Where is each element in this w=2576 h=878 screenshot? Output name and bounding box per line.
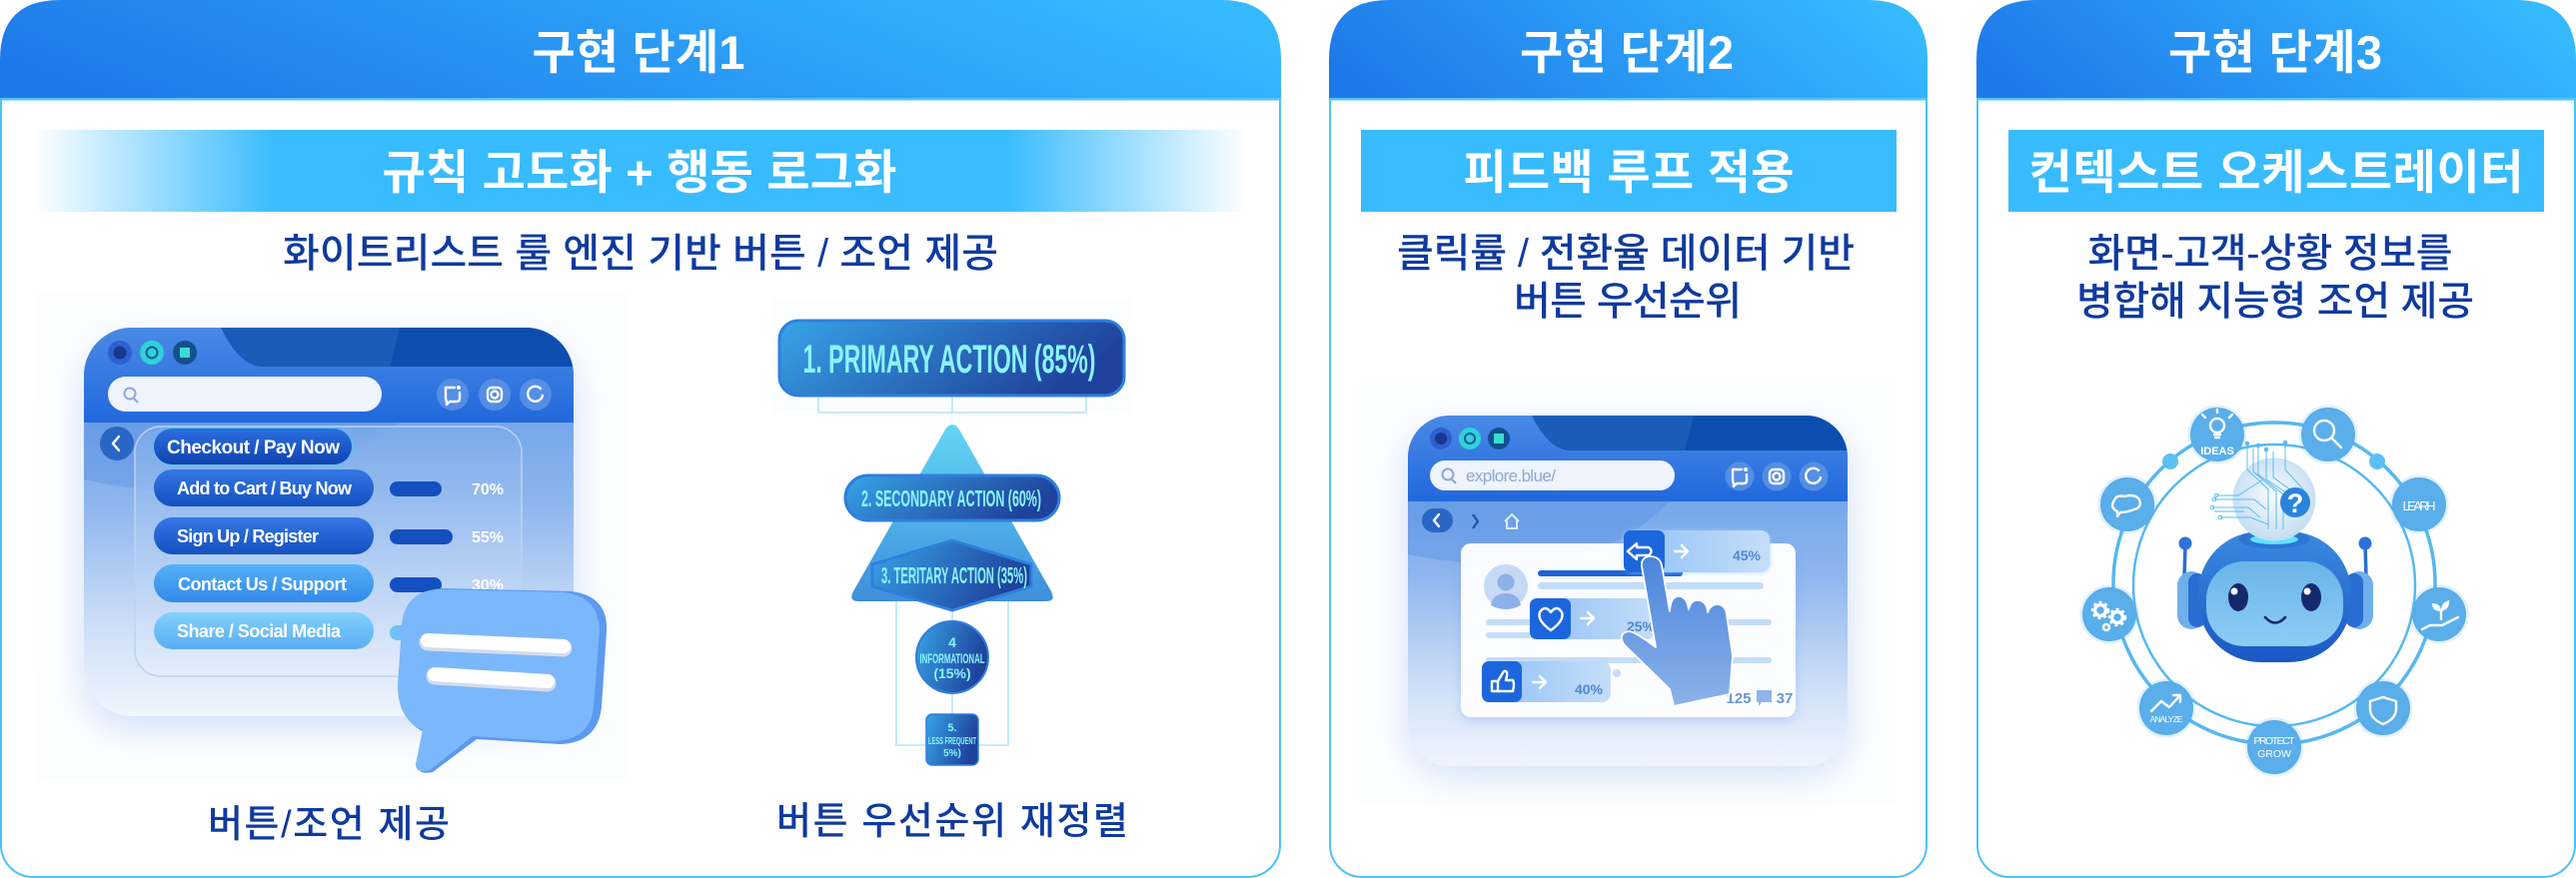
inner list card	[135, 427, 522, 676]
panel: implementation step 2	[1329, 0, 1928, 877]
button: share: Share / Social Media	[177, 621, 342, 641]
label: buttons and advice: 버튼/조언 제공	[208, 804, 450, 846]
ears	[2177, 571, 2373, 629]
diagram: priority hierarchy	[772, 300, 1132, 765]
window dots	[108, 341, 197, 365]
header: step 2: 구현 단계2	[1520, 26, 1734, 79]
level 5: less frequent	[926, 714, 978, 765]
level 2: secondary action: 2. SECONDARY ACTION (60%)	[861, 485, 1041, 511]
icon: magnifier	[2301, 408, 2355, 461]
level 1: primary action: 1. PRIMARY ACTION (85%)	[803, 338, 1095, 382]
level 1: primary action	[779, 321, 1124, 396]
content card	[1461, 543, 1796, 721]
button: checkout	[154, 429, 352, 464]
header: step 2	[1329, 0, 1928, 100]
text: click rate based priority: 버튼 우선순위	[1514, 280, 1742, 324]
icon: gears	[2082, 587, 2136, 641]
back button	[100, 427, 134, 460]
icon: shield	[2356, 681, 2410, 735]
band heading: feedback loop: 피드백 루프 적용	[1463, 146, 1795, 199]
antennae	[2178, 537, 2372, 577]
navigation controls	[1422, 508, 1519, 532]
icon: learn: LEARH	[2402, 498, 2436, 513]
toolbar icons	[1725, 461, 1829, 491]
button: sign up: Sign Up / Register	[177, 526, 319, 546]
band heading: context orchestrator: 컨텍스트 오케스트레이터	[2028, 146, 2524, 199]
icon: protect grow	[2247, 720, 2301, 774]
address bar: explore.blue/	[1466, 466, 1556, 485]
text: context merging description	[2076, 232, 2474, 324]
level 4: informational: 4	[948, 634, 956, 650]
button: contact: Contact Us / Support	[178, 574, 347, 594]
band heading: context orchestrator	[2008, 130, 2544, 212]
label: button priority re-sorting: 버튼 우선순위 재정렬	[776, 801, 1128, 843]
button: share	[154, 612, 430, 649]
button: add to cart: 70%	[472, 481, 504, 498]
icon: learn	[2392, 477, 2446, 531]
button: contact: 30%	[472, 577, 504, 594]
top glow socket	[2238, 530, 2310, 548]
glass globe	[2233, 458, 2315, 540]
tile: heart 25%: 25%	[1627, 618, 1656, 634]
icon: pointing hand	[1622, 556, 1733, 706]
illustration: robot with orbit icons	[2082, 408, 2466, 774]
band heading: feedback loop	[1361, 130, 1897, 212]
content card: 37	[1777, 690, 1793, 707]
level 5: less frequent: 5%)	[943, 748, 961, 759]
icon: analyze: ANALYZE	[2150, 714, 2183, 724]
face screen	[2206, 561, 2343, 646]
level 3: tertiary action	[872, 540, 1031, 610]
button: checkout: Checkout / Pay Now	[167, 438, 340, 458]
icon: protect grow: PROTECT	[2254, 735, 2295, 747]
eyes and smile	[2228, 583, 2321, 623]
question mark badge	[2280, 487, 2310, 518]
header: step 3: 구현 단계3	[2168, 26, 2382, 79]
toolbar icons	[437, 379, 552, 411]
tile: thumbs up 40%: 40%	[1575, 681, 1604, 697]
level 3: tertiary action: 3. TERITARY ACTION (35%)	[881, 562, 1027, 588]
icon: protect grow: GROW	[2257, 748, 2291, 760]
circuit lines	[2210, 440, 2303, 529]
button: sign up: 55%	[472, 529, 504, 546]
button: add to cart: Add to Cart / Buy Now	[177, 478, 353, 498]
icon: analyze	[2139, 681, 2193, 735]
band heading: rule upgrade and behavior logging	[34, 130, 1247, 212]
level 4: informational: (15%)	[933, 665, 971, 681]
button: contact	[154, 564, 504, 602]
text: click rate based priority: 클릭률 / 전환율 데이터 기반	[1397, 232, 1855, 276]
tile: share 45%: 45%	[1733, 547, 1762, 563]
orbit connector dots	[2162, 453, 2385, 469]
robot	[2177, 440, 2373, 662]
tile: thumbs up 40%	[1482, 661, 1611, 702]
level 4: informational: INFORMATIONAL	[919, 650, 985, 666]
header: step 3	[1976, 0, 2576, 100]
tile: heart 25%	[1530, 598, 1656, 639]
button: sign up	[154, 517, 504, 554]
content card: 125	[1726, 690, 1752, 707]
text: context merging description: 화면-고객-상황 정보를	[2088, 232, 2452, 276]
icon: ideas	[2190, 408, 2244, 461]
panel: implementation step 1	[0, 0, 1281, 877]
icon: ideas: IDEAS	[2200, 445, 2234, 457]
speech bubble	[398, 588, 607, 773]
band heading: rule upgrade and behavior logging: 규칙 고도화 + 행동 로그화	[382, 146, 897, 199]
level 4: informational	[916, 621, 988, 693]
header: step 1: 구현 단계1	[532, 26, 745, 79]
search bar	[108, 377, 382, 412]
head	[2198, 531, 2351, 662]
text: whitelist rule engine description: 화이트리스트 룰 엔진 기반 버튼 / 조언 제공	[283, 232, 998, 276]
triangle	[851, 425, 1053, 601]
text: context merging description: 병합해 지능형 조언 제공	[2076, 280, 2474, 324]
level 5: less frequent: 5.	[947, 722, 957, 734]
header: step 1	[0, 0, 1281, 100]
illustration: browser with button list and speech bubble	[64, 324, 608, 773]
icon: chat	[2100, 477, 2154, 531]
button: add to cart	[154, 469, 504, 506]
level 5: less frequent: LESS FREQUENT	[928, 736, 976, 747]
window dots	[1430, 428, 1510, 449]
connector lines	[818, 397, 1086, 745]
address bar	[1430, 460, 1675, 490]
icon: plant in hand	[2412, 587, 2466, 641]
text: click rate based priority	[1397, 232, 1855, 324]
tile: share 45%	[1624, 530, 1770, 572]
illustration: browser with feedback tiles and hand	[1388, 410, 1868, 794]
orbit rings	[2113, 423, 2435, 744]
level 2: secondary action	[845, 475, 1059, 520]
panel: implementation step 3	[1976, 0, 2576, 877]
question mark badge: ?	[2287, 488, 2303, 518]
